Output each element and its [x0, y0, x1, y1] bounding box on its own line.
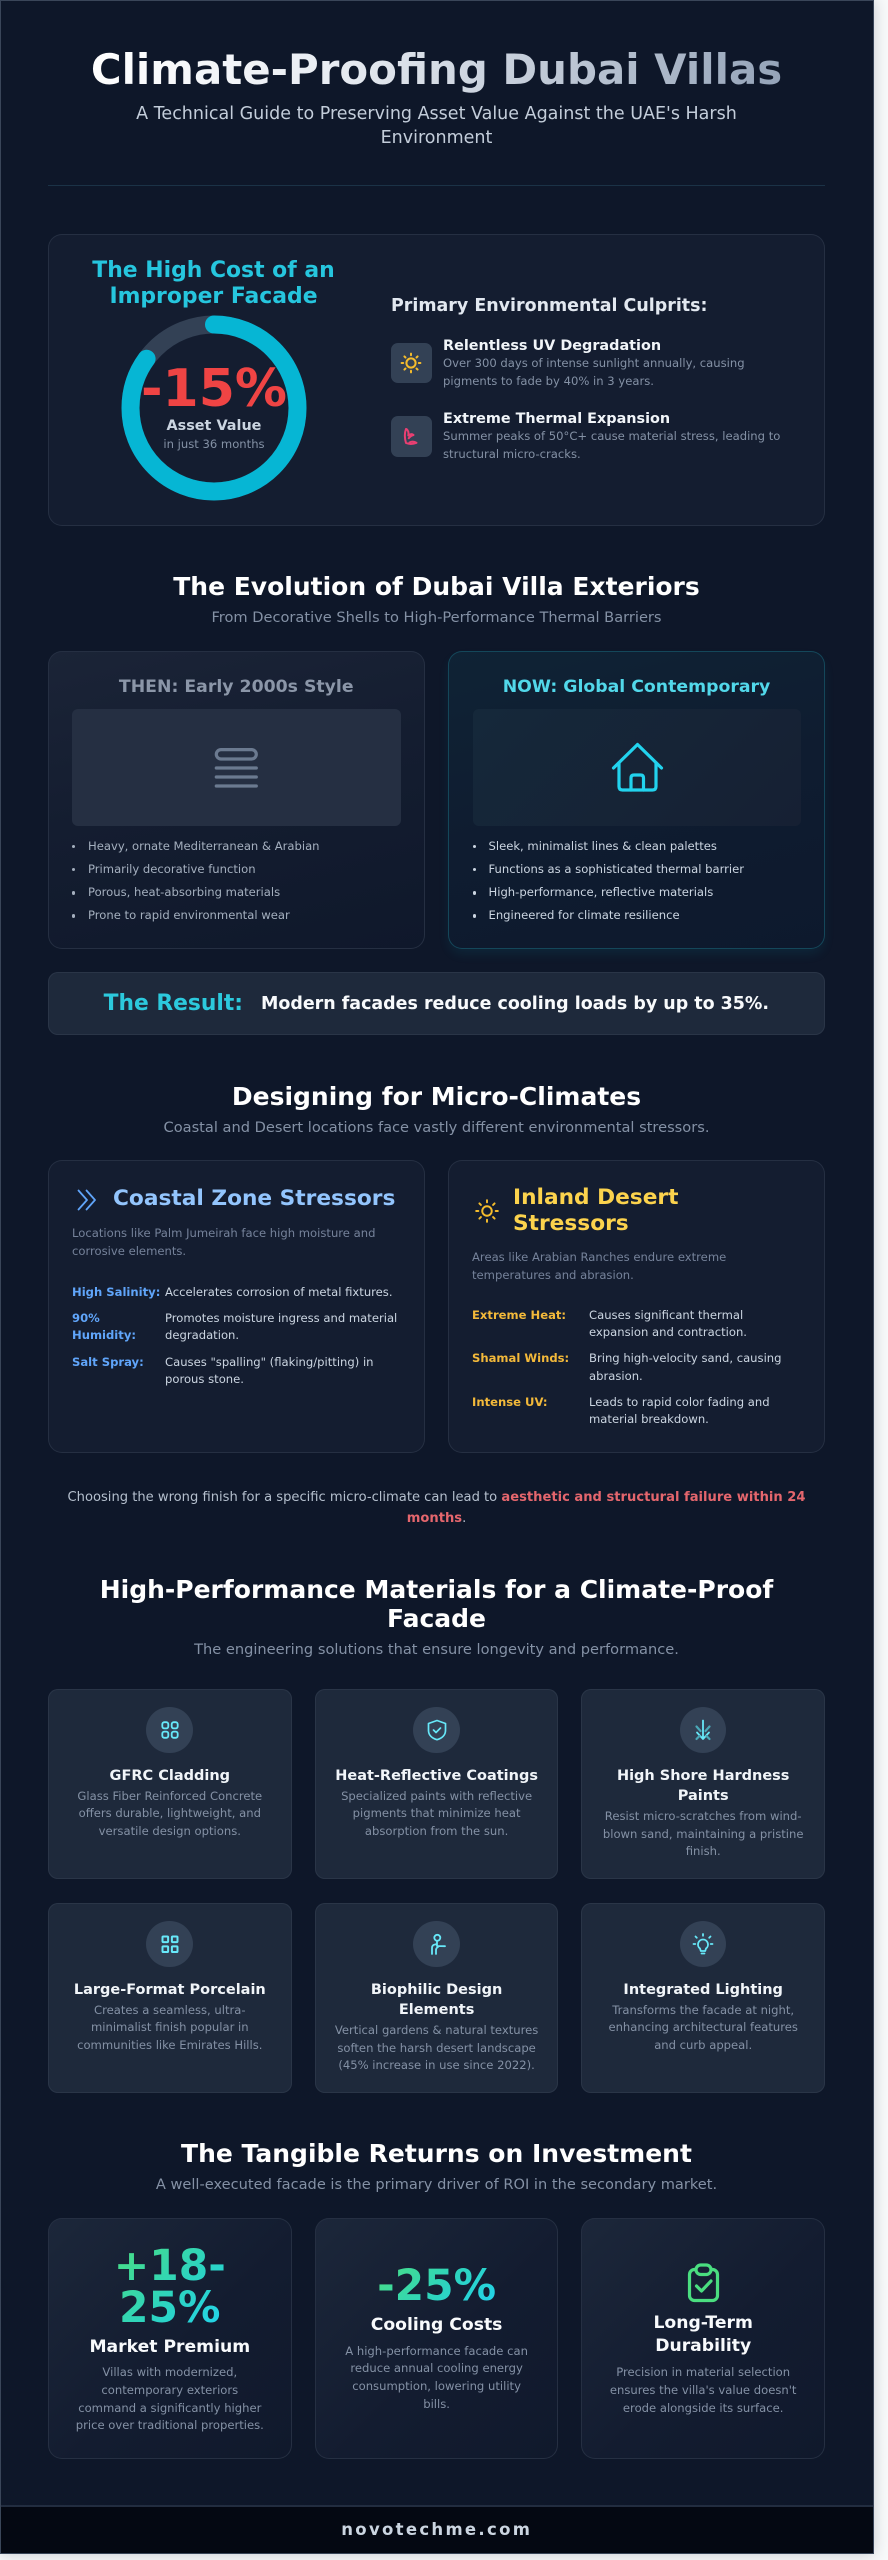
- heading: high cost: Improper Facade: [109, 284, 318, 308]
- coastal stressors: Promotes moisture ingress and material: [165, 1311, 397, 1325]
- culprit: UV degradation: Relentless UV Degradation: [443, 338, 661, 354]
- coastal description: corrosive elements.: [72, 1244, 186, 1258]
- coastal stressors: Salt Spray:: [72, 1355, 144, 1369]
- section heading: materials: Facade: [387, 1604, 486, 1632]
- card: GFRC cladding: [48, 1689, 292, 1879]
- card: long-term durability: Durability: [655, 2336, 751, 2356]
- coastal stressors: Causes "spalling" (flaking/pitting) in: [165, 1355, 374, 1369]
- then list: [72, 838, 320, 922]
- section heading: materials: [100, 1574, 774, 1658]
- card: integrated lighting: Integrated Lighting: [623, 1982, 783, 1998]
- then list: Primarily decorative function: [88, 862, 256, 876]
- now list: [473, 838, 744, 922]
- card: high shore hardness paints: Paints: [678, 1788, 729, 1804]
- coastal stressors: degradation.: [165, 1328, 239, 1342]
- icon: shield: [413, 1707, 460, 1753]
- footer website: novotechme.com: [341, 2520, 532, 2539]
- desert heading: Stressors: [513, 1211, 629, 1236]
- icon: chevrons: [78, 1190, 96, 1210]
- stat: plus 18 to 25 percent: [114, 2241, 226, 2332]
- culprit: UV degradation: [391, 338, 745, 388]
- panel: coastal zone: [48, 1160, 424, 1453]
- card: integrated lighting: and curb appeal.: [654, 2038, 752, 2052]
- desert stressors: Intense UV:: [472, 1395, 548, 1409]
- icon: house: [612, 742, 664, 792]
- subtitle: A Technical Guide to Preserving Asset Value Against the UAE's Harsh: [136, 104, 737, 124]
- icon: thermal stress: [391, 416, 432, 457]
- now list: Functions as a sophisticated thermal barrier: [488, 862, 744, 876]
- now image placeholder with icon: [473, 709, 801, 826]
- card: heat-reflective coatings: Heat-Reflective Coatings: [335, 1768, 538, 1784]
- section heading: returns: [156, 2139, 717, 2193]
- card: integrated lighting: Transforms the facade at night,: [612, 2003, 794, 2017]
- card: market premium: [48, 2218, 292, 2459]
- card: biophilic design elements: soften the harsh desert landscape: [337, 2041, 536, 2055]
- desert stressors: Leads to rapid color fading and: [589, 1395, 770, 1409]
- desert stressors: Bring high-velocity sand, causing: [589, 1351, 782, 1365]
- subtitle: [136, 104, 737, 148]
- culprit: thermal expansion: Summer peaks of 50°C+ cause material stress, leading to: [443, 429, 780, 443]
- card: integrated lighting: enhancing architectural features: [608, 2020, 798, 2034]
- card: market premium: Market Premium: [89, 2337, 250, 2357]
- card: high shore hardness paints: blown sand, maintaining a pristine: [603, 1827, 804, 1841]
- card: biophilic design elements: Vertical gardens & natural textures: [335, 2023, 538, 2037]
- culprit: thermal expansion: [391, 411, 780, 461]
- icon: sun: [475, 1199, 499, 1223]
- section heading: materials: High-Performance Materials for a Climate-Proof: [100, 1574, 773, 1604]
- warning note: [68, 1490, 805, 1526]
- card: cooling costs: bills.: [423, 2397, 450, 2411]
- desert description: [472, 1250, 726, 1282]
- card: biophilic design elements: Biophilic Design: [371, 1982, 502, 1998]
- culprit: UV degradation: pigments to fade by 40% in 3 years.: [443, 374, 654, 388]
- heading: high cost: [92, 258, 335, 308]
- then list: Prone to rapid environmental wear: [88, 908, 290, 922]
- coastal stressors: Humidity:: [72, 1328, 136, 1342]
- card: heat-reflective coatings: Specialized paints with reflective: [341, 1789, 532, 1803]
- card: cooling costs: reduce annual cooling energy: [350, 2361, 523, 2375]
- coastal stressors: High Salinity:: [72, 1285, 160, 1299]
- card: high shore hardness paints: High Shore Hardness: [617, 1768, 789, 1784]
- then list: Heavy, ornate Mediterranean & Arabian: [88, 838, 320, 852]
- stat: minus 25 percent: -25%: [377, 2261, 496, 2310]
- coastal stressors: [72, 1285, 397, 1386]
- panel: coastal zone: porous stone.: [165, 1372, 244, 1386]
- desert stressors: expansion and contraction.: [589, 1325, 747, 1339]
- donut chart: minus 15 percent: Asset Value: [167, 418, 261, 434]
- panel: now: [448, 651, 825, 949]
- card: heat-reflective coatings: [315, 1689, 558, 1879]
- now list: Engineered for climate resilience: [488, 908, 680, 922]
- section heading: evolution: From Decorative Shells to High-Performance Thermal Barriers: [211, 609, 662, 626]
- card: biophilic design elements: (45% increase in use since 2022).: [338, 2058, 535, 2072]
- icon: sun: [391, 343, 432, 383]
- donut chart: minus 15 percent: -15%: [141, 359, 287, 419]
- desert stressors: Extreme Heat:: [472, 1308, 566, 1322]
- card: cooling costs: A high-performance facade can: [345, 2344, 528, 2358]
- card: long-term durability: [581, 2218, 825, 2459]
- now heading: NOW: Global Contemporary: [503, 676, 770, 696]
- icon: light bulb: [680, 1921, 726, 1967]
- card: heat-reflective coatings: absorption from the sun.: [365, 1824, 508, 1838]
- warning note: Choosing the wrong finish for a specific micro-climate can lead to aesthetic and structural failure within 24: [68, 1490, 805, 1505]
- section heading: returns: The Tangible Returns on Investment: [181, 2139, 692, 2168]
- heading: high cost: The High Cost of an: [92, 258, 335, 282]
- card: integrated lighting: [581, 1903, 825, 2093]
- then list: Porous, heat-absorbing materials: [88, 885, 280, 899]
- card: high shore hardness paints: [581, 1689, 825, 1879]
- icon: clipboard check: [688, 2263, 720, 2302]
- card: long-term durability: erode alongside its surface.: [623, 2401, 783, 2415]
- result banner: [48, 972, 825, 1035]
- footer: [0, 2505, 874, 2554]
- desert description: temperatures and abrasion.: [472, 1268, 634, 1282]
- subtitle: Environment: [381, 128, 492, 148]
- card: GFRC cladding: offers durable, lightweight, and: [79, 1806, 261, 1820]
- card: market premium: Villas with modernized,: [102, 2365, 237, 2379]
- card: large-format porcelain: communities like Emirates Hills.: [77, 2038, 262, 2052]
- card: biophilic design elements: [315, 1903, 558, 2093]
- desert stressors: abrasion.: [589, 1369, 643, 1383]
- desert stressors: material breakdown.: [589, 1412, 709, 1426]
- card: long-term durability: Long-Term: [653, 2313, 753, 2333]
- donut chart: minus 15 percent: [122, 316, 306, 500]
- panel: inland desert: [448, 1160, 825, 1453]
- card: GFRC cladding: Glass Fiber Reinforced Concrete: [77, 1789, 262, 1803]
- desert description: Areas like Arabian Ranches endure extreme: [472, 1250, 726, 1264]
- card: market premium: contemporary exteriors: [101, 2383, 238, 2397]
- icon: squares: [146, 1921, 193, 1967]
- card: cooling costs: [315, 2218, 558, 2459]
- now list: High-performance, reflective materials: [488, 885, 713, 899]
- culprit: thermal expansion: Extreme Thermal Expansion: [443, 411, 670, 427]
- card: large-format porcelain: [48, 1903, 292, 2093]
- card: high shore hardness paints: finish.: [686, 1844, 721, 1858]
- title: Climate-Proofing Dubai Villas: [91, 45, 782, 94]
- desert heading: Inland Desert: [513, 1185, 678, 1210]
- desert heading: [513, 1185, 678, 1236]
- card: long-term durability: Precision in material selection: [616, 2365, 790, 2379]
- desert stressors: Shamal Winds:: [472, 1351, 569, 1365]
- card: cooling costs: Cooling Costs: [371, 2315, 502, 2335]
- card: heat-reflective coatings: pigments that minimize heat: [353, 1806, 521, 1820]
- stat: plus 18 to 25 percent: 25%: [119, 2283, 221, 2332]
- culprit: thermal expansion: structural micro-cracks.: [443, 447, 581, 461]
- card: large-format porcelain: Large-Format Porcelain: [74, 1982, 266, 1998]
- section heading: evolution: The Evolution of Dubai Villa Exteriors: [173, 572, 700, 601]
- desert stressors: [472, 1308, 782, 1426]
- culprit: UV degradation: Over 300 days of intense sunlight annually, causing: [443, 356, 745, 370]
- card: biophilic design elements: Elements: [399, 2002, 474, 2018]
- icon: grid: [146, 1707, 193, 1753]
- coastal stressors: Accelerates corrosion of metal fixtures.: [165, 1285, 393, 1299]
- section heading: micro-climates: [164, 1082, 709, 1136]
- section heading: micro-climates: Designing for Micro-Climates: [232, 1082, 641, 1111]
- card: market premium: command a significantly higher: [78, 2401, 261, 2415]
- card: large-format porcelain: minimalist finish popular in: [91, 2020, 249, 2034]
- then image placeholder with icon: [72, 709, 401, 826]
- donut chart: minus 15 percent: in just 36 months: [163, 437, 265, 451]
- card: GFRC cladding: versatile design options.: [99, 1824, 241, 1838]
- coastal stressors: 90%: [72, 1311, 100, 1325]
- panel: then: [48, 651, 424, 949]
- result statement: Modern facades reduce cooling loads by up to 35%.: [261, 994, 769, 1014]
- header: [48, 45, 825, 186]
- result label: The Result:: [104, 991, 243, 1016]
- desert stressors: Causes significant thermal: [589, 1308, 743, 1322]
- card: large-format porcelain: Creates a seamless, ultra-: [94, 2003, 246, 2017]
- icon: person: [413, 1921, 460, 1967]
- card: long-term durability: ensures the villa's value doesn't: [610, 2383, 796, 2397]
- section heading: materials: The engineering solutions that ensure longevity and performance.: [194, 1641, 679, 1658]
- panel: high cost of improper facade: [48, 234, 825, 526]
- section heading: micro-climates: Coastal and Desert locations face vastly different environmental stressors.: [164, 1119, 709, 1136]
- coastal heading: Coastal Zone Stressors: [113, 1186, 395, 1211]
- card: cooling costs: consumption, lowering utility: [352, 2379, 521, 2393]
- card: high shore hardness paints: Resist micro-scratches from wind-: [605, 1809, 802, 1823]
- section heading: returns: A well-executed facade is the primary driver of ROI in the secondary market.: [156, 2176, 717, 2193]
- card: market premium: price over traditional properties.: [76, 2418, 264, 2432]
- coastal description: Locations like Palm Jumeirah face high moisture and: [72, 1226, 375, 1240]
- coastal description: [72, 1226, 375, 1258]
- heading: culprits: Primary Environmental Culprits:: [391, 296, 708, 316]
- card: GFRC cladding: GFRC Cladding: [110, 1768, 230, 1784]
- warning note: months.: [407, 1510, 466, 1526]
- then heading: THEN: Early 2000s Style: [119, 676, 354, 696]
- section heading: evolution: [173, 572, 700, 626]
- now list: Sleek, minimalist lines & clean palettes: [488, 838, 717, 852]
- icon: arrow down: [680, 1707, 726, 1753]
- stat: plus 18 to 25 percent: +18-: [114, 2241, 226, 2290]
